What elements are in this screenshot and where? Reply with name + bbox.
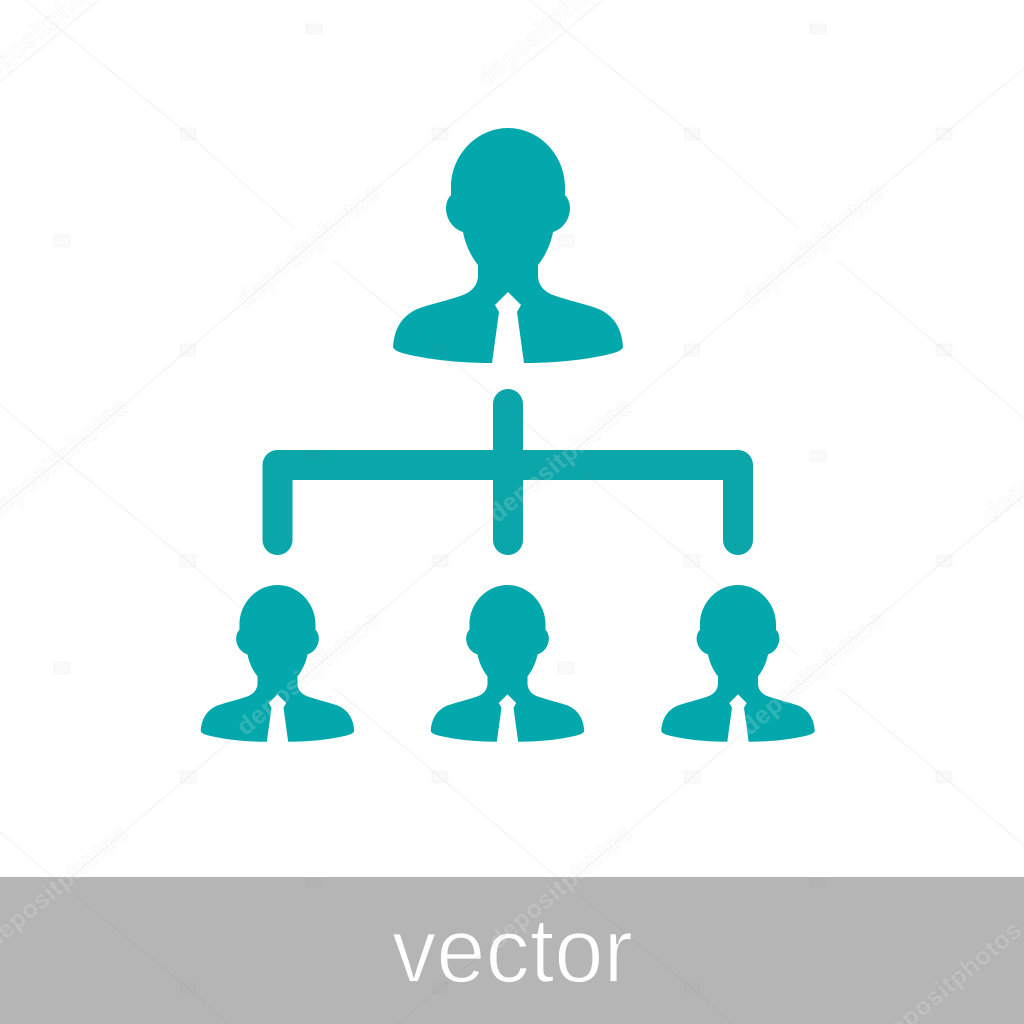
icon: left team member [201,585,354,742]
footer label: vector [392,900,633,1002]
icon: right team member [661,585,815,742]
watermark text: depositphotos [735,178,890,314]
watermark text: depositphotos [483,392,638,528]
icon: centre team member [431,585,584,742]
watermark text: depositphotos [735,605,890,741]
watermark text: depositphotos [231,178,386,314]
watermark text: depositphotos [483,819,638,955]
icon: top manager figure [393,128,623,363]
connector: organisation chart lines [278,404,738,540]
footer band [0,877,1024,1024]
watermark text: depositphotos [231,605,386,741]
